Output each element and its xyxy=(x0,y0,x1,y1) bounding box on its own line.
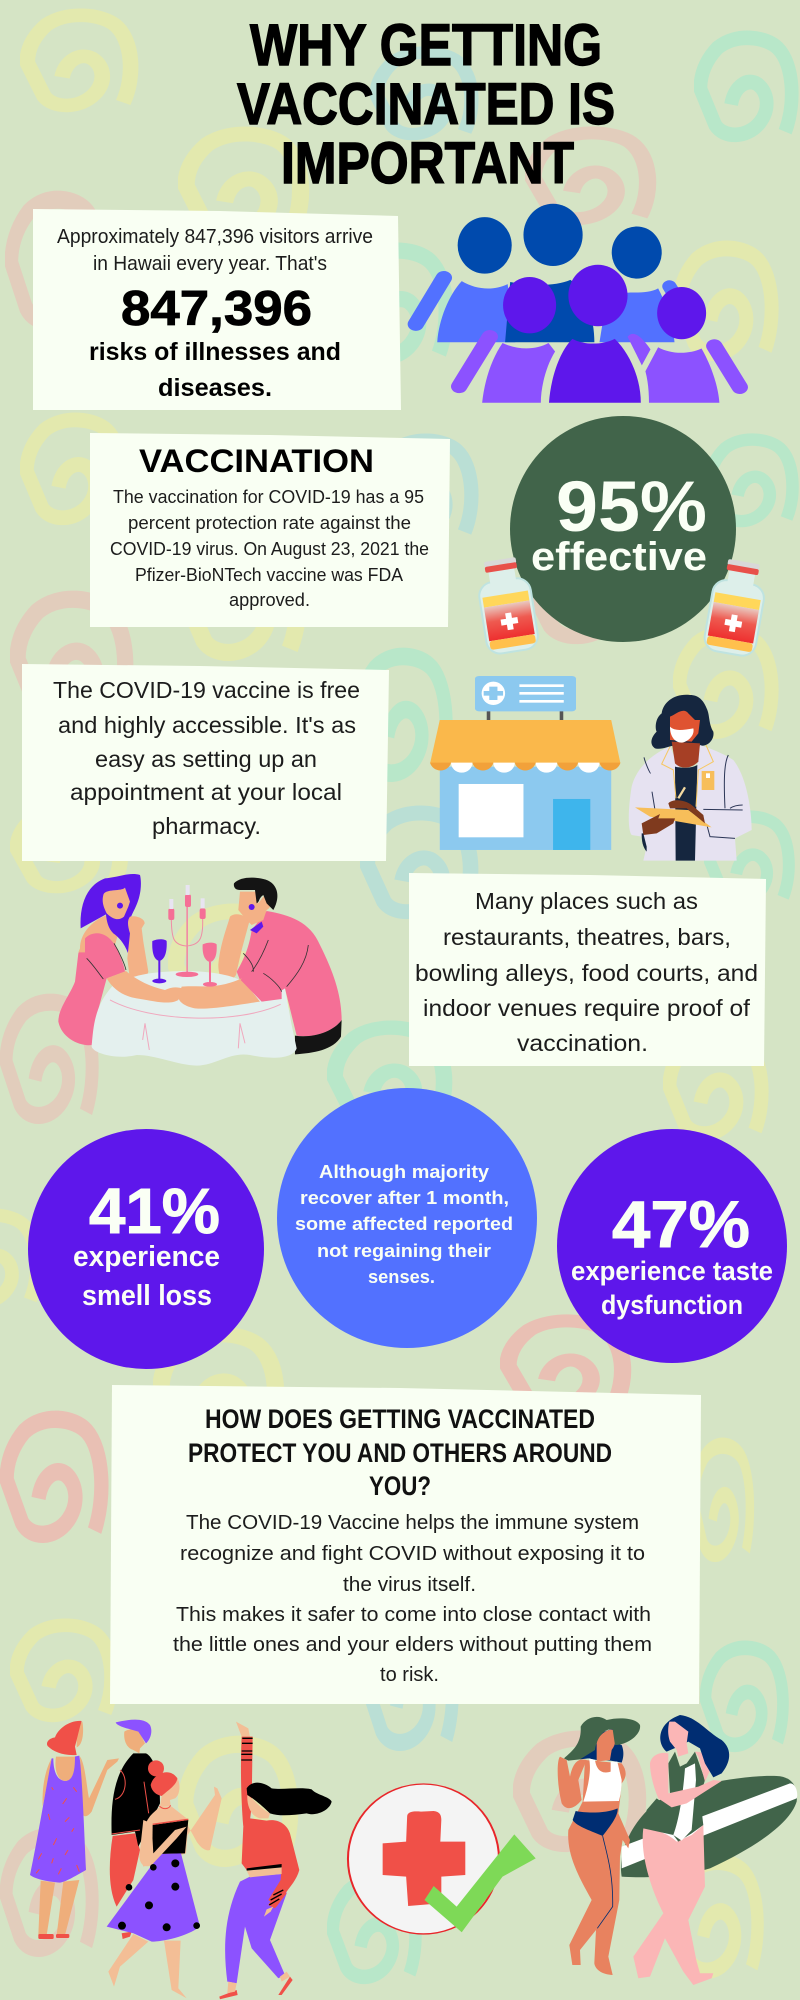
protect heading: HOW DOES GETTING VACCINATED xyxy=(205,1404,595,1434)
risks text: risks of illnesses and xyxy=(89,338,341,366)
title: WHY GETTING xyxy=(250,13,602,78)
protect heading: YOU? xyxy=(369,1471,431,1501)
proof text: restaurants, theatres, bars, xyxy=(443,924,731,950)
panel: vaccination xyxy=(90,433,450,627)
panel: free vaccine xyxy=(22,664,389,861)
taste label: experience taste xyxy=(571,1256,773,1286)
protect heading xyxy=(188,1404,612,1501)
recovery text: not regaining their xyxy=(317,1241,491,1261)
protect body: the virus itself. xyxy=(343,1574,476,1596)
recovery text: recover after 1 month, xyxy=(300,1188,509,1208)
risks text xyxy=(89,338,341,402)
recovery text: some affected reported xyxy=(295,1214,513,1234)
stat: taste dysfunction xyxy=(557,1129,787,1363)
protect body: recognize and fight COVID without exposing it to xyxy=(180,1543,645,1565)
panel: proof of vaccination xyxy=(409,873,766,1066)
proof text: bowling alleys, food courts, and xyxy=(415,960,758,986)
vaccination body: approved. xyxy=(229,590,310,610)
title xyxy=(237,13,615,196)
icon: medical cross with check xyxy=(348,1784,536,1934)
illustration: group of friends xyxy=(30,1720,332,1999)
visitors text: in Hawaii every year. That's xyxy=(93,253,327,275)
vaccination body: The vaccination for COVID-19 has a 95 xyxy=(113,487,424,507)
protect heading: PROTECT YOU AND OTHERS AROUND xyxy=(188,1438,612,1468)
vaccination body: percent protection rate against the xyxy=(128,513,411,533)
protect body xyxy=(173,1512,652,1686)
free vaccine text: pharmacy. xyxy=(152,813,261,839)
protect body: to risk. xyxy=(380,1664,439,1686)
visitors text: Approximately 847,396 visitors arrive xyxy=(57,226,373,248)
free vaccine text: easy as setting up an xyxy=(95,746,317,772)
panel: visitors xyxy=(33,209,401,410)
vaccination body xyxy=(110,487,429,610)
big number: 847,396 xyxy=(121,282,312,336)
stat: smell loss xyxy=(28,1129,264,1369)
smell label: smell loss xyxy=(82,1280,212,1312)
effective badge xyxy=(510,416,736,642)
risks text: diseases. xyxy=(158,374,272,402)
vaccination body: COVID-19 virus. On August 23, 2021 the xyxy=(110,539,429,559)
title: VACCINATED IS xyxy=(237,72,615,137)
icon: vaccine bottle left xyxy=(474,556,540,656)
icon: pharmacy store xyxy=(430,676,620,850)
protect body: The COVID-19 Vaccine helps the immune system xyxy=(186,1512,639,1534)
title: IMPORTANT xyxy=(281,131,574,196)
41 percent: 41% xyxy=(89,1175,220,1247)
recovery text: senses. xyxy=(368,1267,435,1287)
free vaccine text: and highly accessible. It's as xyxy=(58,712,356,738)
icon: doctor xyxy=(629,695,752,861)
protect body: the little ones and your elders without putting them xyxy=(173,1634,652,1656)
recovery text: Although majority xyxy=(319,1162,489,1182)
effective label: effective xyxy=(531,535,707,579)
recovery text xyxy=(295,1162,513,1287)
47 percent: 47% xyxy=(612,1187,750,1261)
smell label xyxy=(73,1241,220,1312)
protect body: This makes it safer to come into close contact with xyxy=(176,1604,651,1626)
vaccination heading: VACCINATION xyxy=(139,443,374,479)
visitors text xyxy=(57,226,373,275)
vaccination body: Pfizer-BioNTech vaccine was FDA xyxy=(135,565,403,585)
proof text: vaccination. xyxy=(517,1030,648,1056)
taste label xyxy=(571,1256,773,1320)
95 percent: 95% xyxy=(556,468,707,547)
proof text xyxy=(415,888,758,1056)
panel: how vaccination protects xyxy=(110,1385,701,1704)
callout: recovery xyxy=(277,1088,537,1348)
free vaccine text: appointment at your local xyxy=(70,779,342,805)
icon: couple at dinner xyxy=(58,874,342,1066)
proof text: Many places such as xyxy=(475,888,698,914)
icon: group of people xyxy=(416,204,740,403)
free vaccine text xyxy=(53,677,360,839)
taste label: dysfunction xyxy=(601,1290,743,1320)
free vaccine text: The COVID-19 vaccine is free xyxy=(53,677,360,703)
proof text: indoor venues require proof of xyxy=(423,995,751,1021)
icon: vaccine bottle right xyxy=(702,557,770,658)
smell label: experience xyxy=(73,1241,220,1273)
illustration: women with surfboard xyxy=(558,1715,797,1985)
